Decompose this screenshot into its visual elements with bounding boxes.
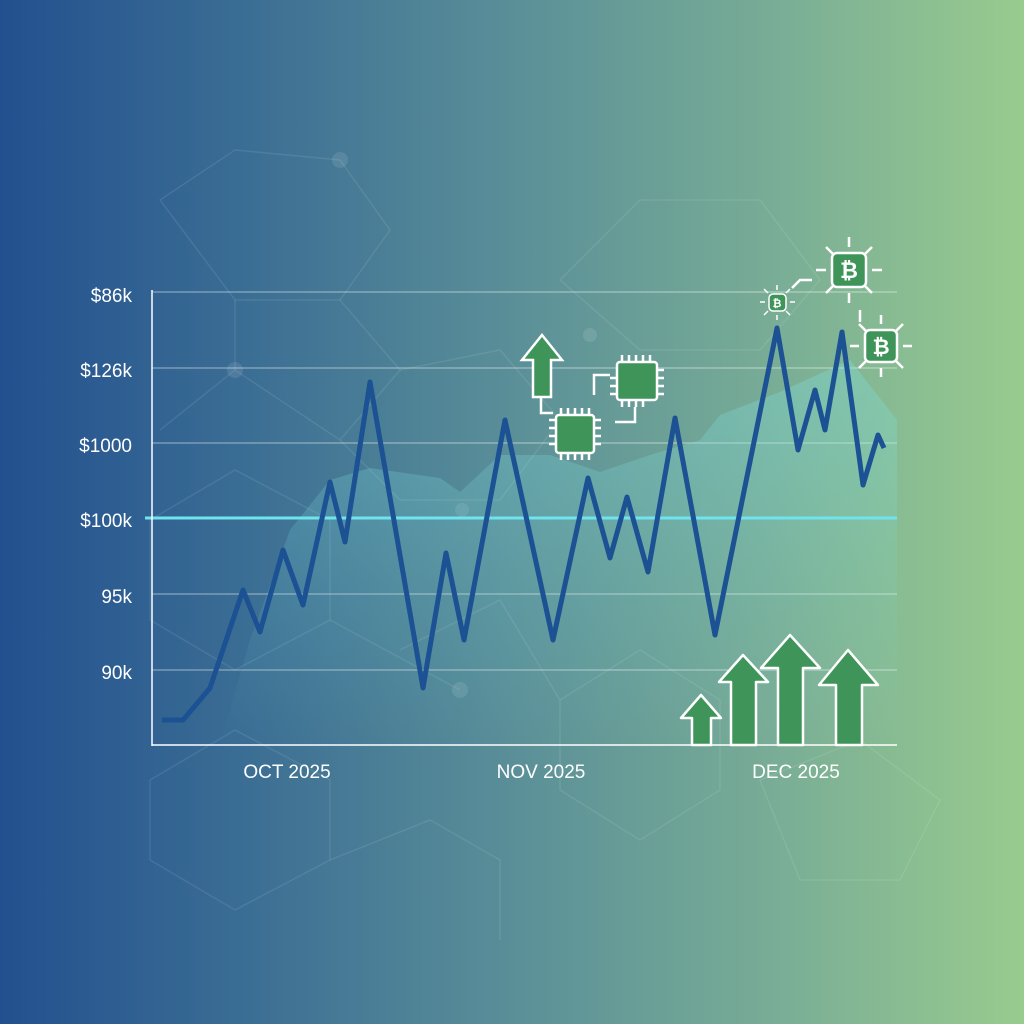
- x axis labels: [243, 762, 840, 783]
- x axis labels: DEC 2025: [752, 762, 840, 783]
- price line: [162, 328, 884, 720]
- text: ₿: [773, 298, 782, 310]
- y axis labels: $100k: [80, 511, 132, 532]
- threshold line $100k: [145, 516, 897, 520]
- area chart: [220, 360, 897, 745]
- y axis labels: [79, 286, 132, 684]
- axes: [152, 290, 897, 746]
- text: ₿: [872, 336, 890, 359]
- y axis labels: $126k: [80, 361, 132, 382]
- grid lines: [152, 292, 897, 670]
- y axis labels: 95k: [101, 587, 132, 608]
- y axis labels: $1000: [79, 436, 132, 457]
- icon: up arrow and chips: [522, 335, 664, 460]
- x axis labels: NOV 2025: [497, 762, 585, 783]
- icon: bitcoin coins: [760, 237, 912, 377]
- y axis labels: 90k: [101, 663, 132, 684]
- y axis labels: $86k: [91, 286, 132, 307]
- x axis labels: OCT 2025: [243, 762, 331, 783]
- icon: growth arrows: [681, 635, 878, 745]
- text: ₿: [840, 258, 858, 283]
